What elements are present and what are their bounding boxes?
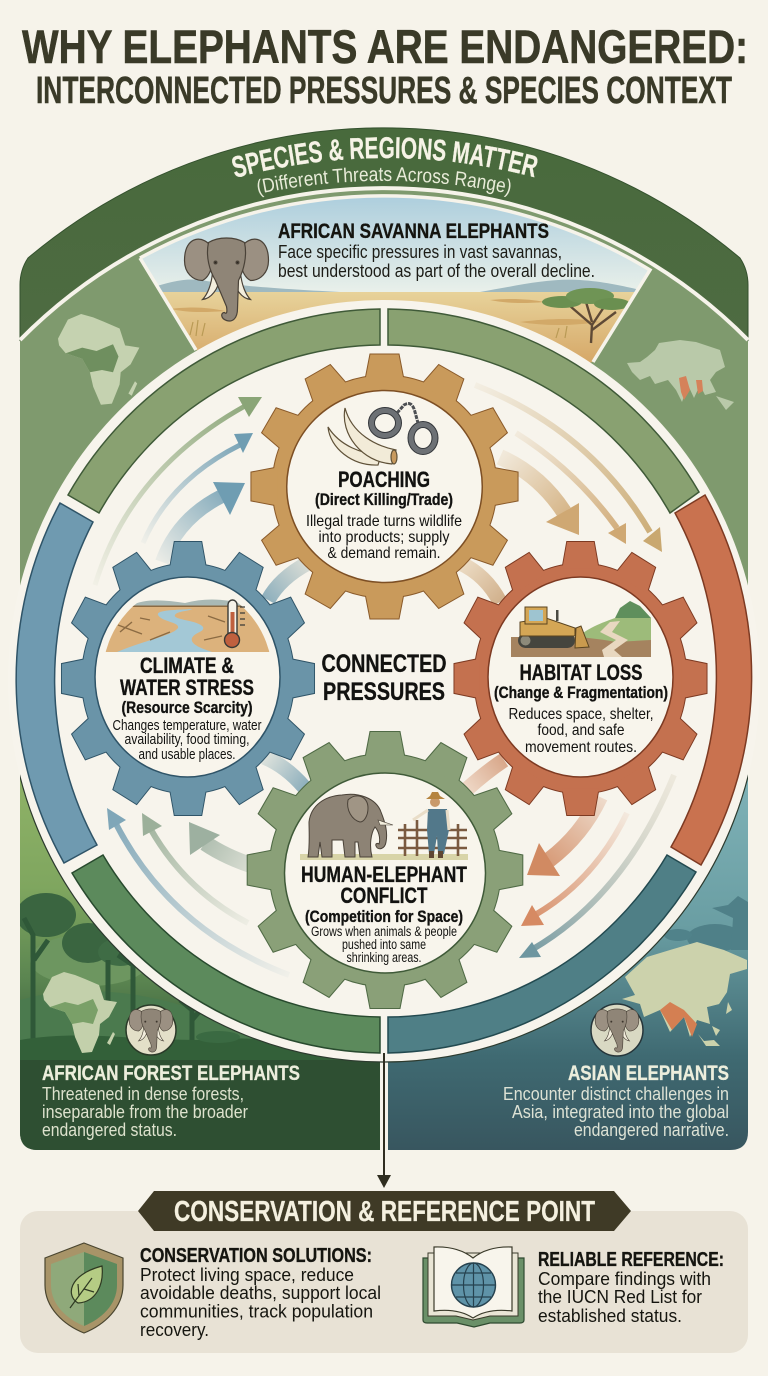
text: climate and water stress: availability, food timing,	[124, 732, 250, 748]
text: reliable reference: Compare findings with	[538, 1268, 711, 1289]
text: Asian description: Encounter distinct challenges in	[503, 1084, 729, 1104]
arrows: top left flow	[95, 397, 262, 585]
ring segment: top left green	[68, 309, 380, 513]
icon: Asian elephant badge	[591, 1004, 643, 1056]
banner: conservation and reference point	[138, 1191, 631, 1231]
text: forest description: endangered status.	[42, 1120, 177, 1140]
text: reliable reference: the IUCN Red List for	[538, 1286, 702, 1307]
icon: shield with leaf	[45, 1243, 123, 1333]
icon: open book with globe	[423, 1247, 524, 1327]
panel: African savanna scene	[138, 194, 652, 363]
subheading: different threats: (Different Threats Across Range)	[258, 167, 510, 198]
title	[22, 20, 748, 112]
text: reliable reference: established status.	[538, 1305, 682, 1326]
gear: habitat loss	[454, 542, 707, 815]
panel: African forest scene	[16, 775, 380, 1153]
ring segment: bottom right teal	[388, 855, 696, 1053]
text: climate and water stress: and usable places.	[138, 747, 236, 763]
icon: drought river and thermometer	[100, 600, 275, 652]
text: conservation solutions: CONSERVATION SOLUTIONS:	[140, 1245, 372, 1267]
text: Asian description: endangered narrative.	[574, 1120, 729, 1140]
text: conservation solutions: communities, track population	[140, 1300, 373, 1322]
text: habitat loss	[494, 660, 668, 756]
center label: connected pressures	[322, 650, 446, 706]
gear: climate and water stress	[62, 542, 314, 815]
banner: conservation and reference point: CONSERVATION & REFERENCE POINT	[174, 1196, 595, 1228]
text: conservation solutions: recovery.	[140, 1319, 209, 1340]
text: savanna description	[278, 242, 595, 281]
text: poaching: into products; supply	[318, 529, 450, 546]
icon: savanna elephant head	[184, 238, 268, 321]
text: forest description: inseparable from the broader	[42, 1102, 248, 1122]
connected ring backdrop	[8, 300, 760, 1062]
text: poaching: POACHING	[338, 467, 430, 492]
ring segment: top right green	[388, 309, 699, 513]
text: habitat loss: movement routes.	[525, 739, 637, 756]
arrows: bottom left flow	[107, 808, 289, 975]
text: savanna description: Face specific pressures in vast savannas,	[278, 242, 562, 262]
heading: Asian elephants: ASIAN ELEPHANTS	[568, 1061, 729, 1085]
text: forest description	[42, 1084, 248, 1140]
text: habitat loss: Reduces space, shelter,	[508, 706, 654, 723]
connector arrows between gears	[264, 563, 504, 790]
text: human-elephant conflict: HUMAN-ELEPHANT	[301, 862, 467, 887]
text: human-elephant conflict	[301, 862, 467, 965]
text: habitat loss: (Change & Fragmentation)	[494, 684, 668, 702]
text: human-elephant conflict: pushed into same	[342, 937, 426, 952]
text: Asian description	[503, 1084, 729, 1140]
map: Asia	[622, 942, 747, 1046]
icon: ivory tusks	[328, 408, 397, 465]
center label: connected pressures: CONNECTED	[322, 650, 446, 678]
ring segment: bottom left green	[72, 855, 380, 1053]
text: poaching: Illegal trade turns wildlife	[306, 513, 462, 530]
icon: handcuffs	[372, 404, 435, 452]
text: climate and water stress: Changes temperature, water	[112, 718, 262, 734]
arrows: top right flow	[475, 385, 662, 552]
center label: connected pressures: PRESSURES	[323, 678, 445, 706]
icon: elephant, farmer and fence	[300, 792, 468, 860]
map: African forest range	[43, 972, 117, 1053]
text: savanna description: best understood as part of the overall decline.	[278, 261, 595, 281]
text: human-elephant conflict: Grows when animals & people	[311, 924, 457, 939]
ring segment: left blue	[16, 503, 97, 863]
ring segments	[16, 309, 752, 1053]
heading: African forest elephants: AFRICAN FOREST ELEPHANTS	[42, 1061, 300, 1085]
acacia tree	[542, 288, 630, 343]
heading: African savanna elephants: AFRICAN SAVANNA ELEPHANTS	[278, 219, 549, 243]
arrows: bottom right flow	[519, 775, 674, 958]
panel: side regions upper green	[20, 188, 748, 790]
text: climate and water stress	[112, 653, 262, 763]
panel: conservation and reference	[20, 1191, 748, 1353]
text: poaching: (Direct Killing/Trade)	[315, 491, 453, 509]
text: human-elephant conflict: (Competition for Space)	[305, 907, 463, 926]
text: climate and water stress: (Resource Scarcity)	[122, 699, 252, 717]
ring segment: right red	[671, 495, 752, 865]
text: climate and water stress: CLIMATE &	[140, 653, 234, 678]
text: conservation solutions: avoidable deaths, support local	[140, 1282, 381, 1303]
text: climate and water stress: WATER STRESS	[120, 675, 254, 700]
icon: forest elephant badge	[126, 1005, 176, 1055]
map: Africa range	[58, 314, 139, 405]
text: conservation solutions: Protect living space, reduce	[140, 1264, 354, 1285]
text: habitat loss: HABITAT LOSS	[520, 660, 642, 685]
gear: human-elephant conflict	[248, 732, 522, 1008]
arrow: down to conservation	[377, 1053, 391, 1188]
text: habitat loss: food, and safe	[538, 722, 625, 739]
text: poaching: & demand remain.	[328, 545, 440, 562]
map: Asia range	[627, 340, 734, 410]
text: poaching	[306, 467, 462, 562]
panel: species and regions arch band	[20, 127, 748, 342]
text: forest description: Threatened in dense forests,	[42, 1084, 244, 1104]
gear: poaching	[251, 354, 518, 618]
heading: species and regions matter: SPECIES & REGIONS MATTER	[232, 136, 538, 178]
text: human-elephant conflict: shrinking areas.	[346, 950, 422, 965]
text: human-elephant conflict: CONFLICT	[340, 883, 428, 908]
text: Asian description: Asia, integrated into the global	[512, 1102, 729, 1122]
icon: bulldozer scene	[511, 601, 651, 657]
panel: Asian elephants scene	[388, 775, 748, 1150]
text: conservation solutions	[140, 1245, 381, 1340]
text: reliable reference	[538, 1249, 724, 1326]
text: reliable reference: RELIABLE REFERENCE:	[538, 1249, 724, 1271]
